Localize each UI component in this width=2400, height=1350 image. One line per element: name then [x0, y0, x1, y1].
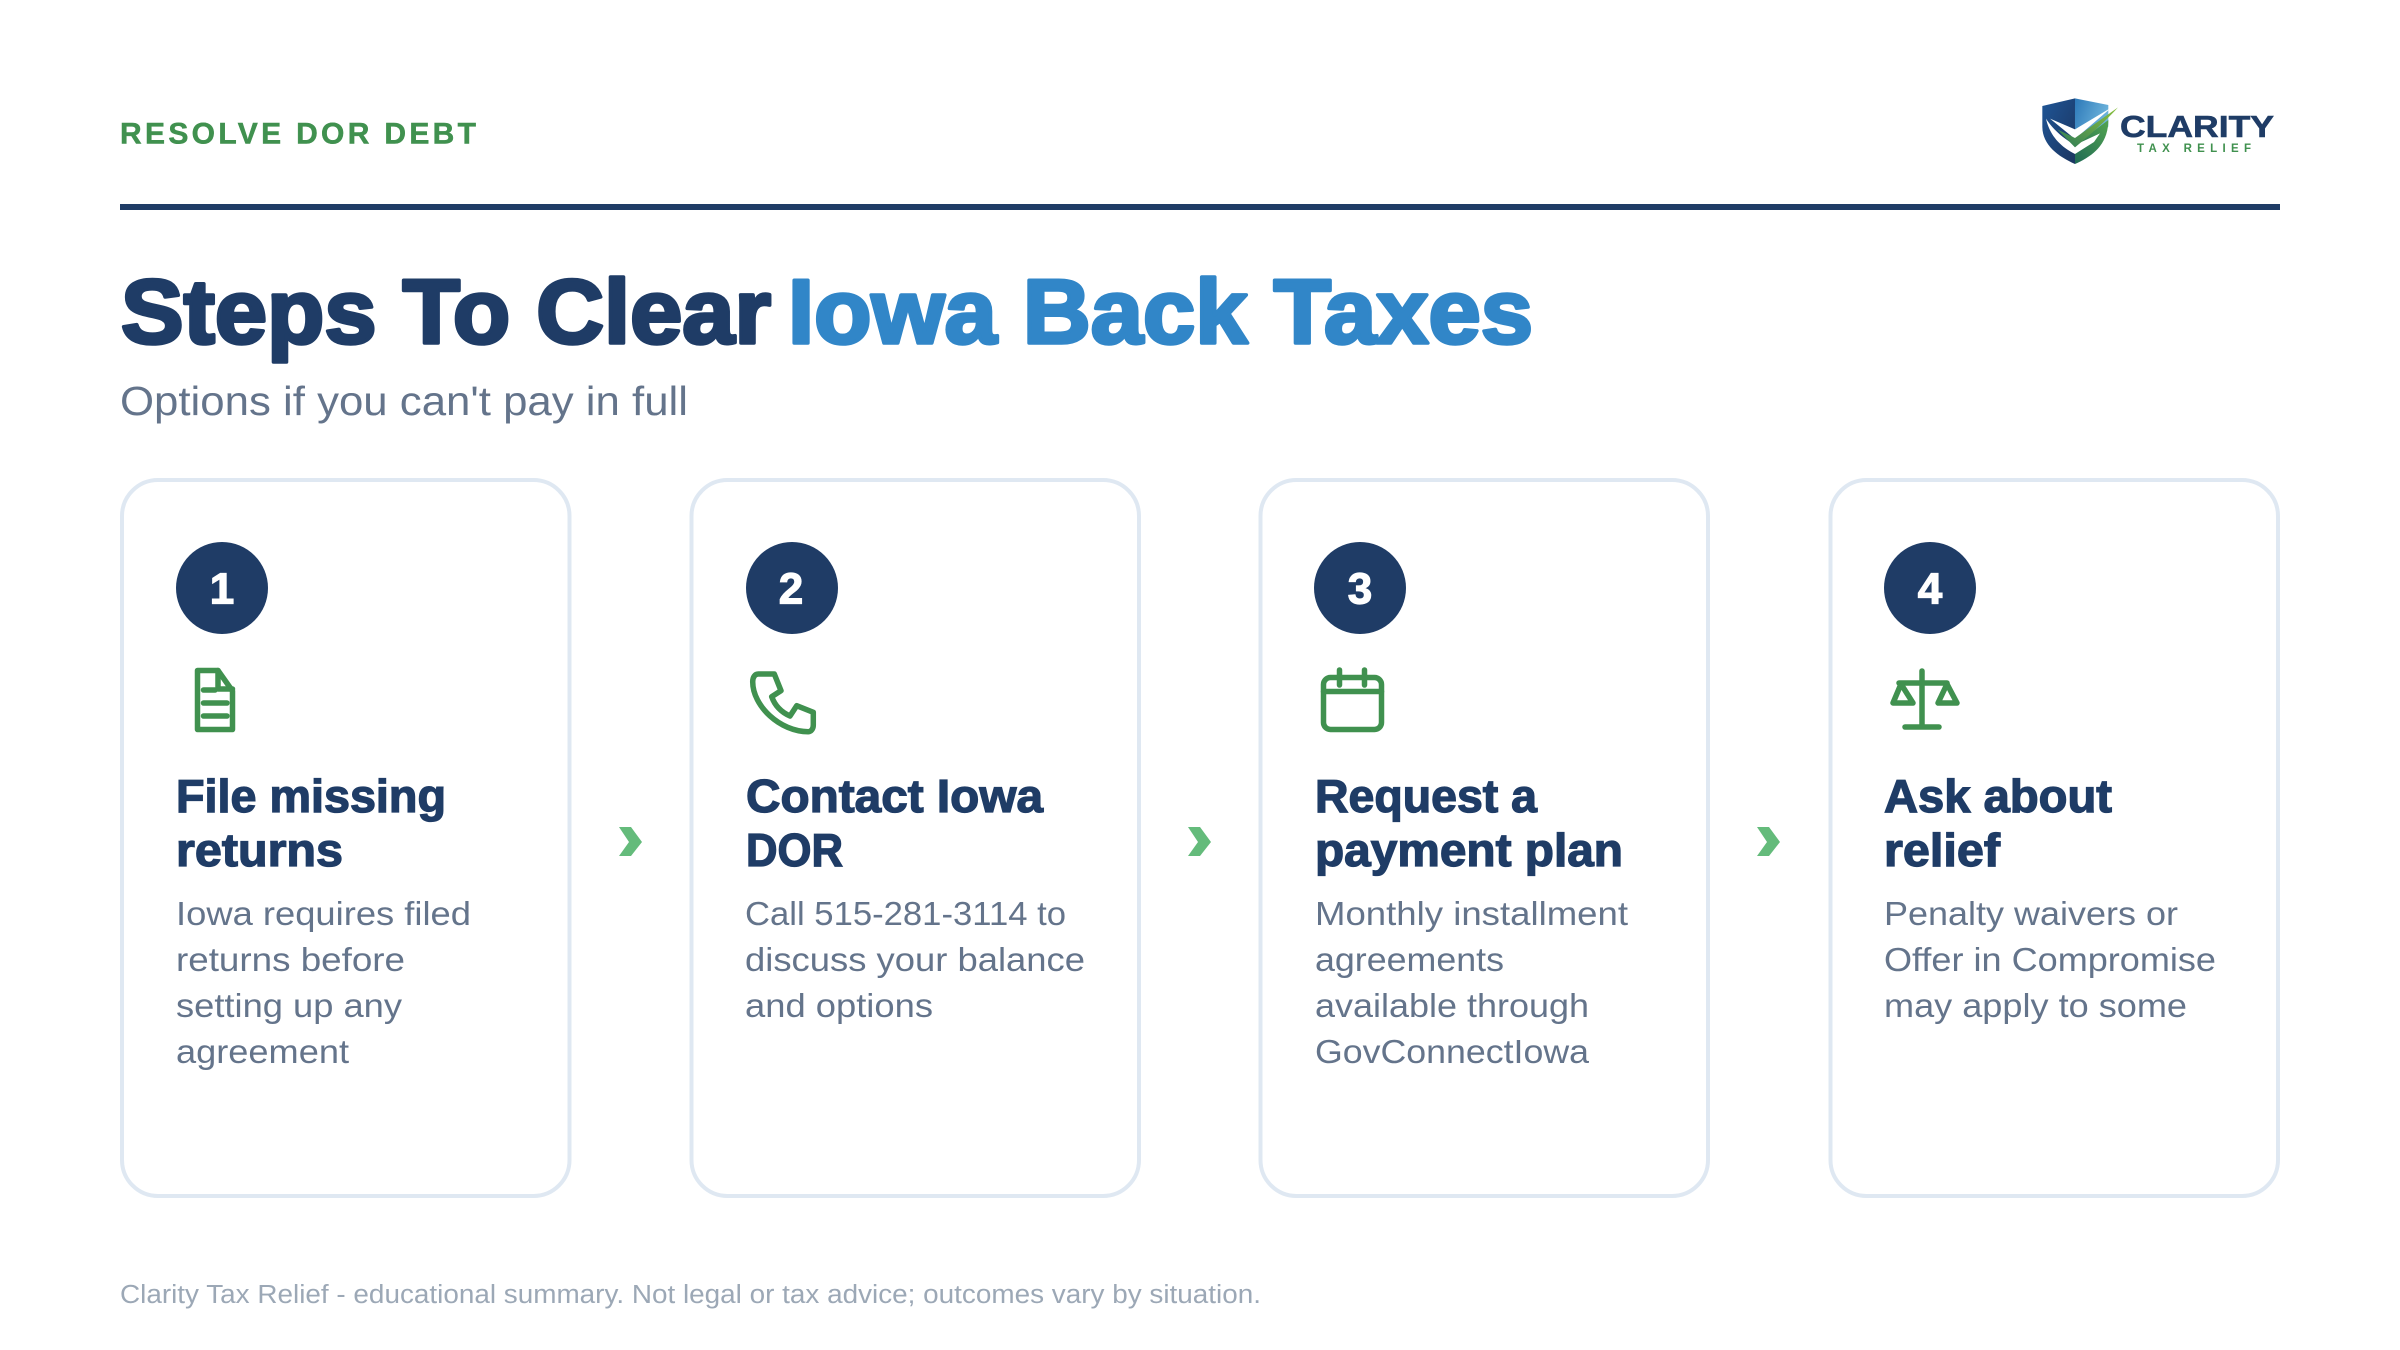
step 3 heading	[1315, 770, 1623, 876]
eyebrow label: RESOLVE DOR DEBT	[120, 118, 476, 150]
step 2 heading	[746, 770, 1043, 876]
step 4 heading: relief	[1884, 824, 2001, 876]
title	[121, 262, 1533, 363]
header rule	[120, 204, 2280, 210]
step 4 heading: Ask about	[1884, 770, 2112, 822]
step 4 description: may apply to some	[1884, 987, 2187, 1024]
arrow 1	[619, 827, 642, 856]
step 3 heading: Request a	[1315, 770, 1537, 822]
panel: step 2	[692, 480, 1139, 1196]
step 3 description: GovConnectIowa	[1315, 1033, 1590, 1070]
step 3 description: Monthly installment	[1315, 895, 1628, 932]
step 1 description: setting up any	[176, 987, 403, 1024]
step number 1: 1	[210, 564, 234, 614]
logo: Clarity Tax Relief	[2042, 98, 2274, 164]
step 4 description: Offer in Compromise	[1884, 941, 2216, 978]
panel: step 3	[1260, 480, 1708, 1196]
footer disclaimer: Clarity Tax Relief - educational summary. Not legal or tax advice; outcomes vary by situation.	[120, 1281, 1261, 1309]
icon: phone	[753, 674, 813, 732]
step 2 description: discuss your balance	[745, 941, 1085, 978]
step number 1	[176, 542, 268, 634]
step 1 description: agreement	[176, 1033, 349, 1070]
step 1 heading: File missing	[176, 770, 446, 822]
step 2 description: and options	[745, 987, 933, 1024]
step 1 description: Iowa requires filed	[176, 895, 471, 932]
step 1 description: returns before	[176, 941, 405, 978]
step 3 description: available through	[1315, 987, 1589, 1024]
title: Steps To Clear	[121, 262, 771, 363]
step number 2	[746, 542, 838, 634]
logo wordmark: CLARITY	[2120, 109, 2274, 144]
icon: document	[198, 670, 232, 730]
step 1 description	[176, 895, 471, 1070]
step 3 description: agreements	[1315, 941, 1504, 978]
subtitle: Options if you can't pay in full	[120, 378, 688, 424]
icon: calendar	[1324, 670, 1382, 730]
step 1 heading	[176, 770, 446, 876]
step number 4: 4	[1918, 564, 1943, 614]
step 1 heading: returns	[176, 824, 343, 876]
step 2 description	[745, 895, 1085, 1024]
step 4 description: Penalty waivers or	[1884, 895, 2178, 932]
step number 3: 3	[1348, 564, 1372, 614]
icon: scales	[1893, 671, 1957, 727]
step 2 heading: Contact Iowa	[746, 770, 1043, 822]
arrow 3	[1757, 827, 1780, 856]
logo tagline: TAX RELIEF	[2137, 143, 2251, 155]
arrow 2	[1188, 827, 1211, 856]
step 3 heading: payment plan	[1315, 824, 1623, 876]
logo shield	[2042, 98, 2118, 164]
step 4 heading	[1884, 770, 2112, 876]
step 2 heading: DOR	[746, 824, 843, 876]
step number 2: 2	[779, 564, 803, 614]
step number 3	[1314, 542, 1406, 634]
title: Iowa Back Taxes	[788, 262, 1533, 363]
step 3 description	[1315, 895, 1628, 1070]
step number 4	[1884, 542, 1976, 634]
panel: step 1	[122, 480, 570, 1196]
step 4 description	[1884, 895, 2216, 1024]
panel: step 4	[1830, 480, 2278, 1196]
step 2 description: Call 515-281-3114 to	[745, 895, 1066, 932]
